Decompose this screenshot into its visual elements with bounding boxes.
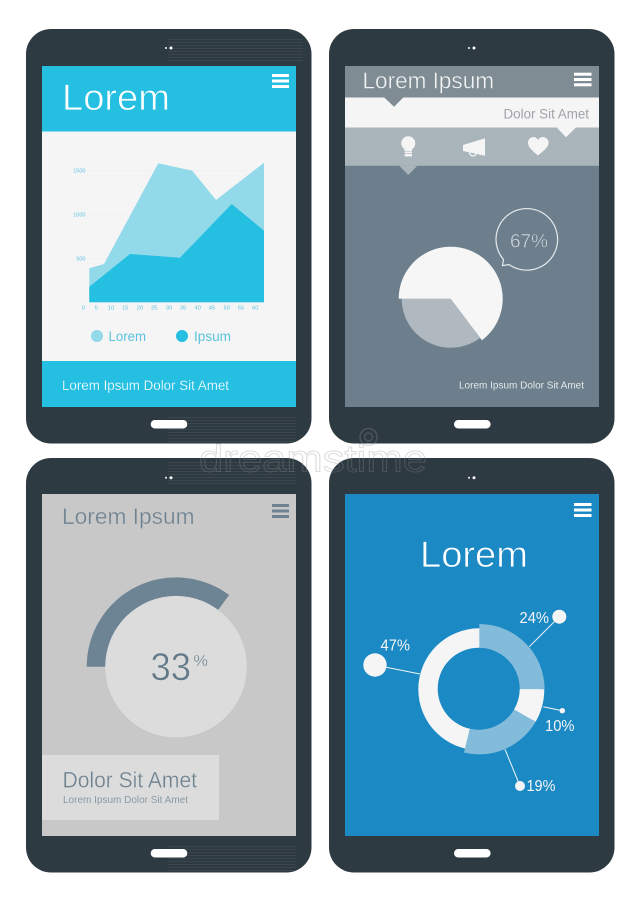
callout: 19%: [505, 749, 556, 795]
title: Lorem: [420, 534, 528, 575]
legend: Ipsum: [194, 329, 231, 344]
icon: light bulb: [401, 136, 415, 156]
callout: 24%: [520, 610, 566, 647]
callout: 67%: 67%: [510, 232, 548, 252]
y axis labels: 500: [76, 256, 86, 262]
camera dots: [468, 46, 476, 50]
icon: menu: [574, 503, 592, 517]
home button: [151, 849, 187, 858]
callout: 10%: [543, 707, 574, 735]
home button: [454, 849, 491, 858]
gauge value: 33: [150, 646, 191, 689]
camera dots: [468, 476, 476, 479]
callout: 47%: [363, 638, 420, 677]
footer text: Lorem Ipsum Dolor Sit Amet: [62, 378, 229, 393]
home button: [151, 420, 187, 428]
x axis labels: 15: [122, 306, 129, 312]
callout: 47%: 47%: [380, 638, 410, 655]
x axis labels: 55: [238, 306, 244, 312]
tablet body: [329, 458, 614, 872]
screen: [345, 66, 599, 407]
x axis labels: [82, 306, 259, 312]
screen: [42, 494, 296, 836]
x axis labels: 35: [180, 306, 186, 312]
icon: megaphone: [463, 138, 485, 156]
pie chart: [399, 247, 503, 348]
light icon band: [345, 128, 599, 166]
x axis labels: 10: [108, 306, 114, 312]
icon: menu: [574, 73, 592, 86]
y axis labels: 1000: [73, 212, 86, 218]
tablet body: [329, 29, 614, 444]
header bar: [345, 66, 599, 98]
callout: 24%: 24%: [520, 610, 549, 627]
panel: tablet with pie chart: [329, 29, 614, 444]
legend: Lorem: [108, 329, 146, 344]
icon: heart: [528, 137, 549, 156]
panel: tablet with donut chart: [329, 458, 614, 872]
camera dots: [165, 46, 172, 50]
callout: 10%: 10%: [545, 718, 574, 735]
x axis labels: 5: [95, 306, 98, 312]
y axis labels: 1500: [73, 169, 86, 175]
y axis labels: [73, 169, 86, 262]
subtitle: Dolor Sit Amet: [504, 106, 589, 122]
home button: [454, 420, 491, 428]
x axis labels: 45: [209, 306, 215, 312]
caption box: Lorem Ipsum Dolor Sit Amet: [63, 794, 188, 806]
series: Ipsum: [89, 204, 264, 302]
gauge chart: %: [194, 653, 208, 670]
area chart: [73, 163, 264, 312]
screen: [345, 494, 599, 836]
panel: tablet with area chart: [26, 29, 312, 444]
title: Lorem Ipsum: [62, 504, 194, 529]
x axis labels: 40: [194, 306, 201, 312]
title: Lorem: [62, 77, 170, 118]
x axis labels: 20: [137, 306, 143, 312]
watermark: dreamstime: [199, 438, 427, 480]
x axis labels: 25: [151, 306, 158, 312]
tablet body: [26, 29, 312, 444]
footer bar: [42, 361, 296, 407]
icon: menu: [272, 74, 289, 88]
white subtitle band: [345, 98, 599, 128]
title: Lorem Ipsum: [362, 67, 494, 93]
header bar: [42, 66, 296, 132]
icon: menu: [272, 504, 289, 518]
legend: [91, 329, 231, 344]
series: Lorem: [89, 163, 264, 302]
gauge chart: [87, 577, 247, 738]
panel: tablet with gauge: [26, 458, 312, 872]
x axis labels: 0: [82, 306, 85, 312]
screen: [42, 66, 296, 407]
x axis labels: 60: [252, 306, 259, 312]
donut chart: [418, 624, 545, 754]
callout: 19%: 19%: [526, 778, 556, 795]
x axis labels: 50: [223, 306, 230, 312]
caption box: [42, 755, 219, 820]
footer text: Lorem Ipsum Dolor Sit Amet: [459, 380, 584, 392]
caption box: Dolor Sit Amet: [62, 767, 197, 792]
tablet body: [26, 458, 312, 872]
callout: 67%: [496, 209, 558, 270]
camera dots: [165, 476, 172, 479]
x axis labels: 30: [166, 306, 172, 312]
